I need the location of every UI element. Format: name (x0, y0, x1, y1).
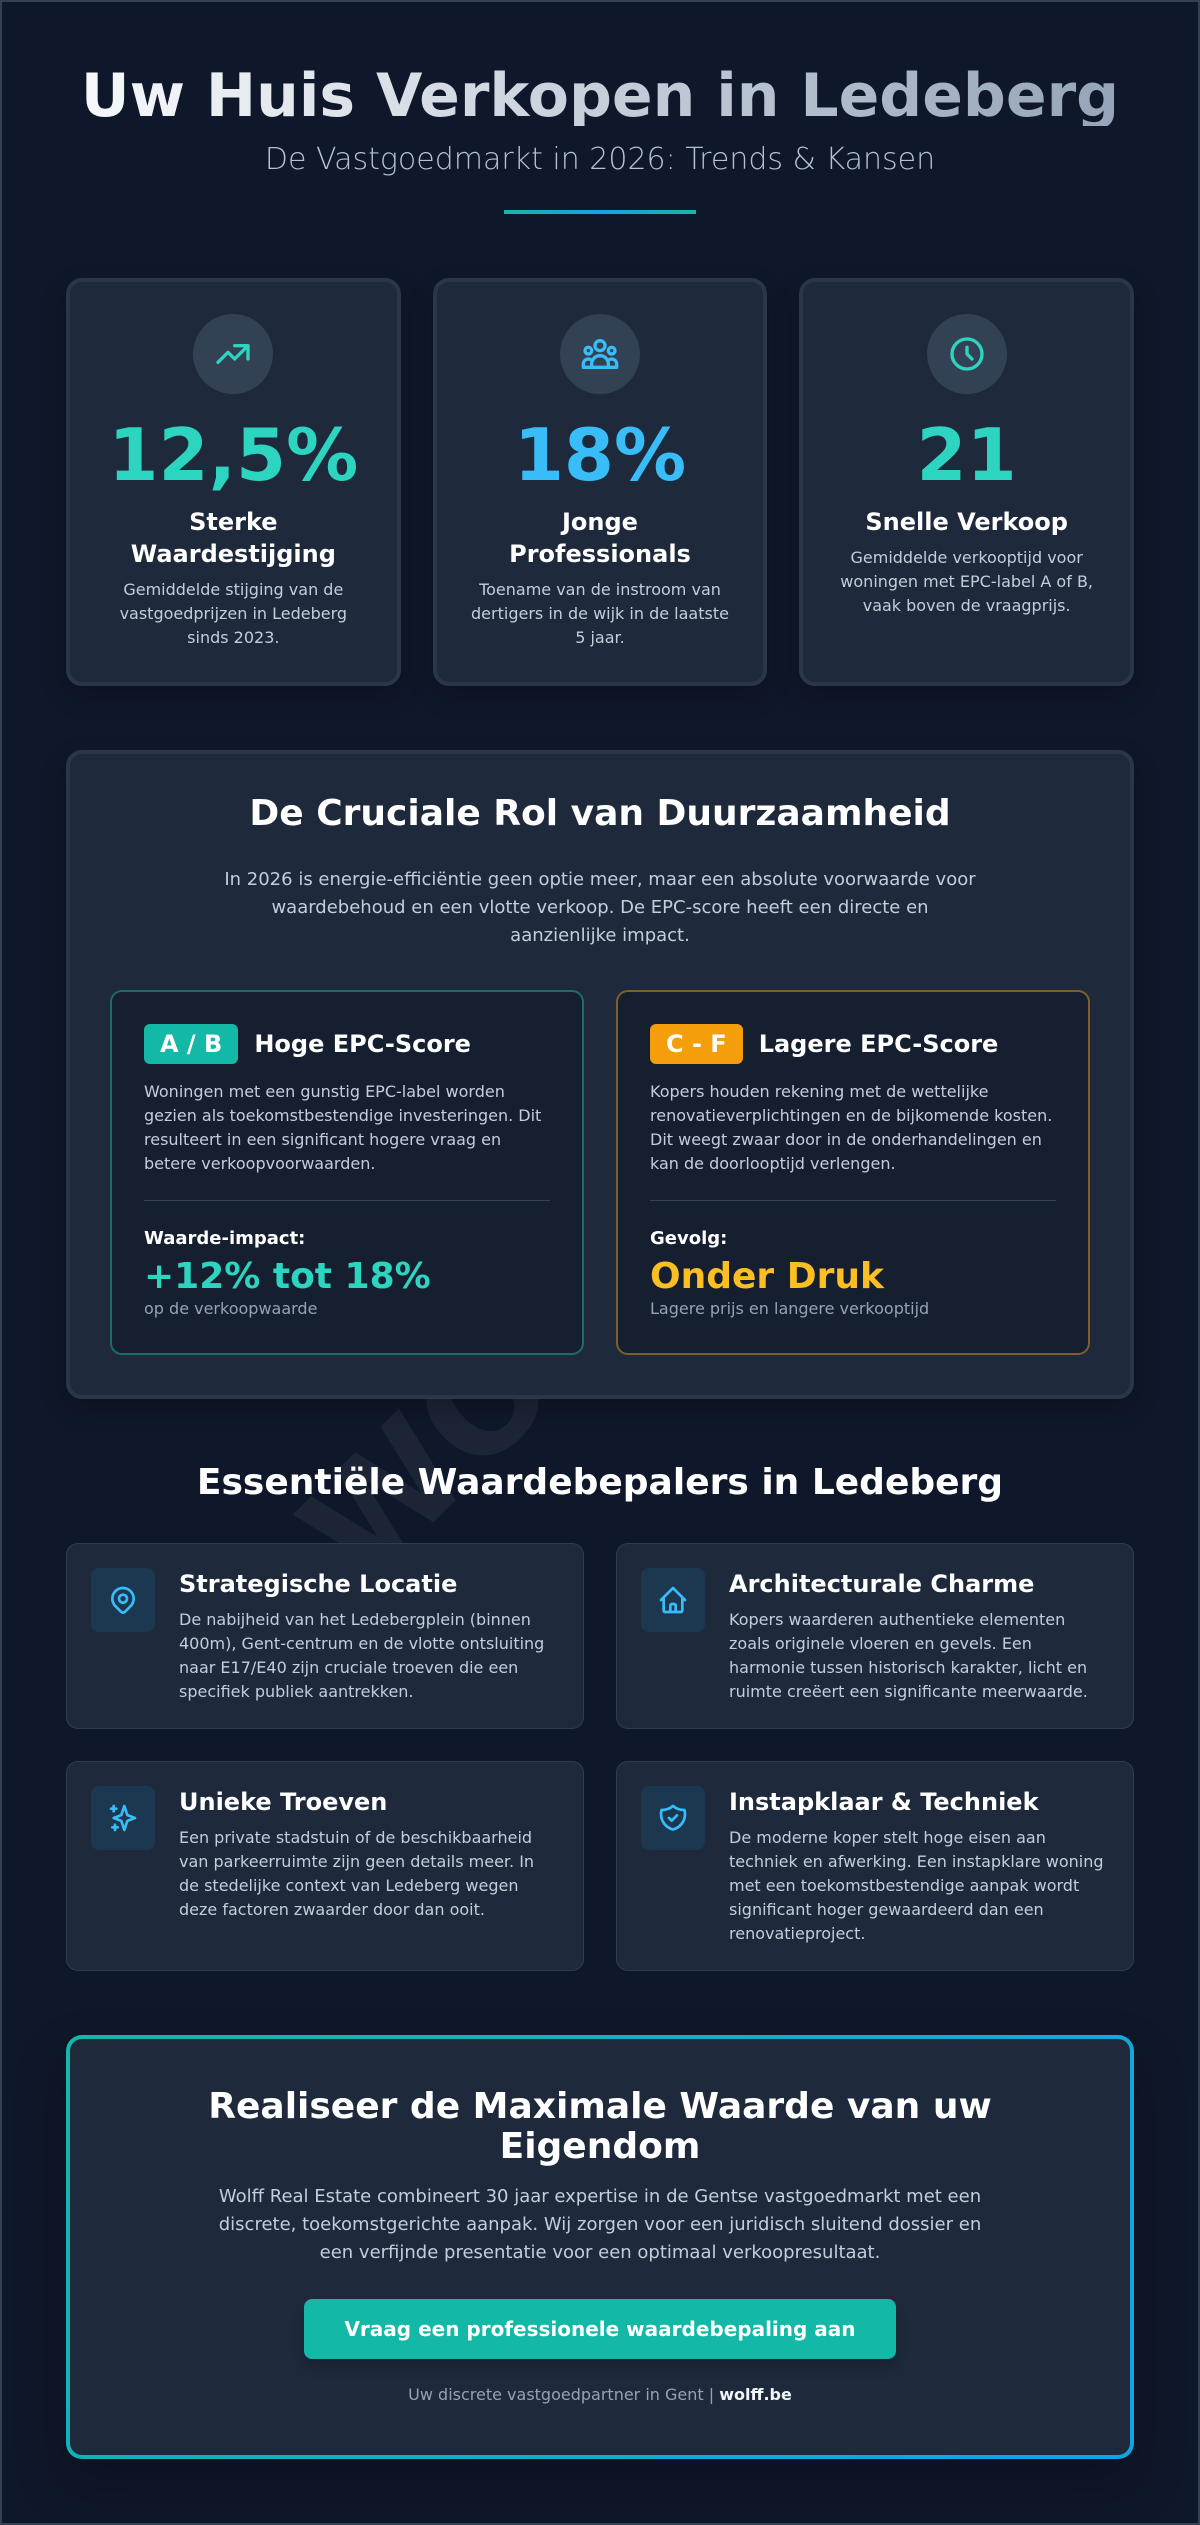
icon: clock (927, 314, 1007, 394)
stat description: Toename van de instroom van dertigers in de wijk in de laatste 5 jaar. (471, 580, 729, 647)
stat number: 18% (514, 413, 686, 497)
consequence: Onder Druk (650, 1256, 884, 1297)
card header: Hoge EPC-Score (254, 1030, 471, 1058)
feature: instapklaar en techniek (616, 1761, 1134, 1971)
consequence: Lagere prijs en langere verkooptijd (650, 1299, 929, 1318)
value impact: Waarde-impact: (144, 1228, 305, 1249)
panel heading: De Cruciale Rol van Duurzaamheid (249, 793, 951, 834)
card header (650, 1024, 998, 1064)
feature text: Unieke Troeven (179, 1788, 387, 1816)
feature: unieke troeven (66, 1761, 584, 1971)
cta heading: Realiseer de Maximale Waarde van uw Eigendom (208, 2086, 992, 2167)
feature text: Een private stadstuin of de beschikbaarheid van parkeerruimte zijn geen details meer. In de stedelijke context van Ledeberg wegen deze factoren zwaarder door dan ooit. (179, 1828, 534, 1919)
feature text: De moderne koper stelt hoge eisen aan techniek en afwerking. Een instapklare woning met een toekomstbestendige aanpak wordt significant hoger gewaardeerd dan een renovatieproject. (729, 1828, 1104, 1943)
icon: map pin (91, 1568, 155, 1632)
stat description: Gemiddelde verkooptijd voor woningen met EPC-label A of B, vaak boven de vraagprijs. (840, 548, 1093, 615)
card: lagere EPC-score (616, 990, 1090, 1355)
panel: duurzaamheid (66, 750, 1134, 1399)
icon: sparkles (91, 1786, 155, 1850)
stat number: 12,5% (108, 413, 358, 497)
card text: Kopers houden rekening met de wettelijke renovatieverplichtingen en de bijkomende kosten. Dit weegt zwaar door in de onderhandelingen en kan de doorlooptijd verlengen. (650, 1082, 1052, 1173)
icon: house (641, 1568, 705, 1632)
stat heading: Snelle Verkoop (865, 508, 1068, 536)
feature text: Instapklaar & Techniek (729, 1788, 1039, 1816)
cta button (304, 2299, 896, 2359)
card header (144, 1024, 471, 1064)
cta button: Vraag een professionele waardebepaling aan (344, 2317, 856, 2341)
stat description: Gemiddelde stijging van de vastgoedprijzen in Ledeberg sinds 2023. (120, 580, 347, 647)
value impact: op de verkoopwaarde (144, 1299, 317, 1318)
watermark: WOLFF (269, 1094, 791, 1616)
consequence (650, 1200, 1056, 1321)
feature text: Architecturale Charme (729, 1570, 1034, 1598)
card header: Lagere EPC-Score (759, 1030, 998, 1058)
stat number: 21 (917, 413, 1017, 497)
cta footer: Uw discrete vastgoedpartner in Gent | wolff.be (408, 2385, 792, 2404)
card header: A / B (160, 1030, 222, 1058)
stat heading: Sterke Waardestijging (131, 508, 336, 568)
feature text: Kopers waarderen authentieke elementen zoals originele vloeren en gevels. Een harmonie tussen historisch karakter, licht en ruimte creëert een significante meerwaarde. (729, 1610, 1088, 1701)
card: hoge EPC-score (110, 990, 584, 1355)
feature: architecturale charme (616, 1543, 1134, 1729)
panel intro text: In 2026 is energie-efficiëntie geen optie meer, maar een absolute voorwaarde voor waardebehoud en een vlotte verkoop. De EPC-score heeft een directe en aanzienlijke impact. (224, 869, 976, 946)
icon: people group (560, 314, 640, 394)
cta text: Wolff Real Estate combineert 30 jaar expertise in de Gentse vastgoedmarkt met een discrete, toekomstgerichte aanpak. Wij zorgen voor een juridisch sluitend dossier en een verfijnde presentatie voor een optimaal verkoopresultaat. (219, 2186, 981, 2263)
icon: shield check (641, 1786, 705, 1850)
card text: Woningen met een gunstig EPC-label worden gezien als toekomstbestendige investeringen. Dit resulteert in een significant hogere vraag en betere verkoopvoorwaarden. (144, 1082, 541, 1173)
feature text (179, 1788, 534, 1919)
call to action panel (66, 2035, 1134, 2459)
card header: C - F (666, 1030, 727, 1058)
feature text: Strategische Locatie (179, 1570, 457, 1598)
stat card: waardestijging (66, 278, 401, 686)
consequence: Gevolg: (650, 1228, 727, 1249)
icon: trending up (193, 314, 273, 394)
section heading: Essentiële Waardebepalers in Ledeberg (197, 1462, 1003, 1503)
stat card: jonge professionals (433, 278, 767, 686)
feature text (729, 1570, 1088, 1701)
subtitle: De Vastgoedmarkt in 2026: Trends & Kansen (265, 142, 935, 177)
value impact (144, 1200, 550, 1321)
feature text: De nabijheid van het Ledebergplein (binnen 400m), Gent-centrum en de vlotte ontsluiting naar E17/E40 zijn cruciale troeven die een specifiek publiek aantrekken. (179, 1610, 544, 1701)
feature: strategische locatie (66, 1543, 584, 1729)
stat heading: Jonge Professionals (509, 508, 691, 568)
stat card: snelle verkoop (799, 278, 1134, 686)
value impact: +12% tot 18% (144, 1256, 431, 1297)
title: Uw Huis Verkopen in Ledeberg (81, 61, 1119, 131)
feature text (179, 1570, 544, 1701)
